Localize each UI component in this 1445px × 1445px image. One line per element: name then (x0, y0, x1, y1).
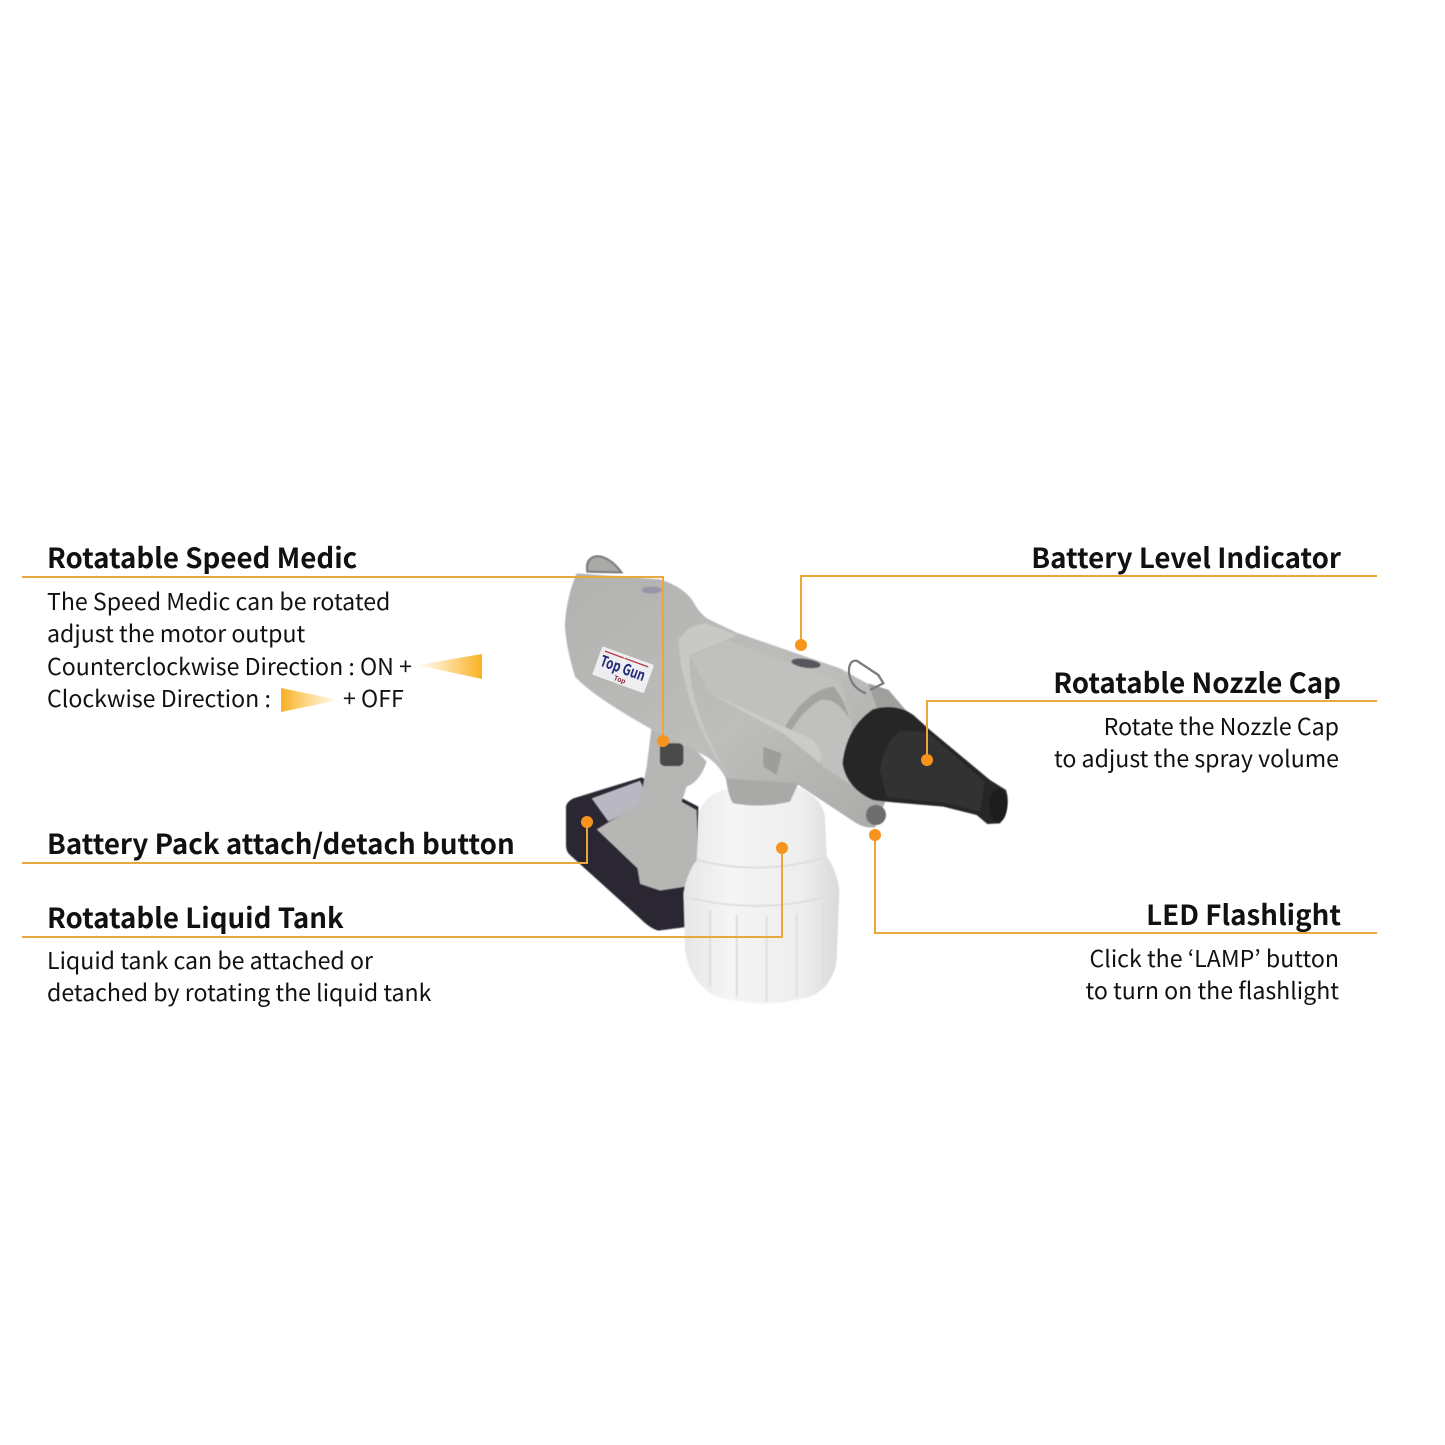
icon: spray on (417, 654, 482, 679)
marker dot (921, 754, 933, 766)
grip and base (597, 727, 707, 891)
description line: Clockwise Direction : (47, 680, 271, 714)
side bar (710, 693, 822, 763)
leader line (875, 835, 1377, 933)
battery label (592, 781, 650, 822)
leader line (22, 577, 663, 742)
marker dot (657, 735, 669, 747)
heading: LED Flashlight (1146, 893, 1341, 933)
nozzle bracket (868, 683, 917, 727)
flashlight (866, 805, 886, 825)
description line: Counterclockwise Direction : ON + (47, 648, 412, 682)
tank ridges (684, 857, 839, 1002)
tank neck (726, 778, 798, 805)
gun body (565, 573, 917, 827)
description line: detached by rotating the liquid tank (47, 974, 432, 1008)
wire handle (849, 661, 883, 693)
panel: battery pack button (22, 816, 593, 863)
description: Liquid tank can be attached or (47, 942, 374, 976)
lower pocket (763, 747, 782, 775)
nozzle cap (843, 707, 1008, 824)
marker dot (581, 816, 593, 828)
speed dial (660, 743, 683, 766)
logo label: Top (613, 672, 627, 686)
panel: rotatable nozzle cap (921, 661, 1377, 774)
leader line (927, 701, 1377, 760)
marker dot (795, 639, 807, 651)
heading: Rotatable Liquid Tank (47, 896, 344, 936)
leader line (801, 576, 1377, 645)
battery pack (566, 777, 698, 931)
description line: to turn on the flashlight (1085, 972, 1339, 1006)
description: Click the ‘LAMP’ button (1089, 940, 1339, 974)
logo label: Top Gun (597, 649, 649, 686)
panel: rotatable speed medic (22, 536, 669, 747)
heading: Rotatable Speed Medic (47, 536, 357, 576)
heading: Battery Pack attach/detach button (47, 822, 515, 862)
barrel panel (690, 640, 853, 787)
leader line (22, 822, 587, 863)
description line: to adjust the spray volume (1054, 740, 1339, 774)
icon: spray off (281, 688, 339, 712)
leader line (22, 848, 782, 937)
description line: adjust the motor output (47, 615, 306, 649)
marker dot (776, 842, 788, 854)
liquid tank (683, 787, 839, 1003)
top ring (587, 556, 622, 573)
panel: battery level indicator (795, 536, 1377, 651)
heading: Battery Level Indicator (1031, 536, 1342, 576)
panel: rotatable liquid tank (22, 842, 788, 1008)
top button (642, 586, 662, 594)
curved fin (785, 687, 850, 730)
barrel collar (678, 623, 737, 778)
nozzle tip (990, 789, 1007, 822)
description: Rotate the Nozzle Cap (1104, 708, 1339, 742)
heading: Rotatable Nozzle Cap (1053, 661, 1341, 701)
panel: led flashlight (869, 829, 1377, 1006)
marker dot (869, 829, 881, 841)
nozzle cone (880, 731, 985, 812)
battery level indicator (791, 657, 821, 670)
description: The Speed Medic can be rotated (47, 583, 390, 617)
description line: + OFF (343, 680, 404, 714)
product illustration: sprayer gun (565, 556, 1008, 1003)
